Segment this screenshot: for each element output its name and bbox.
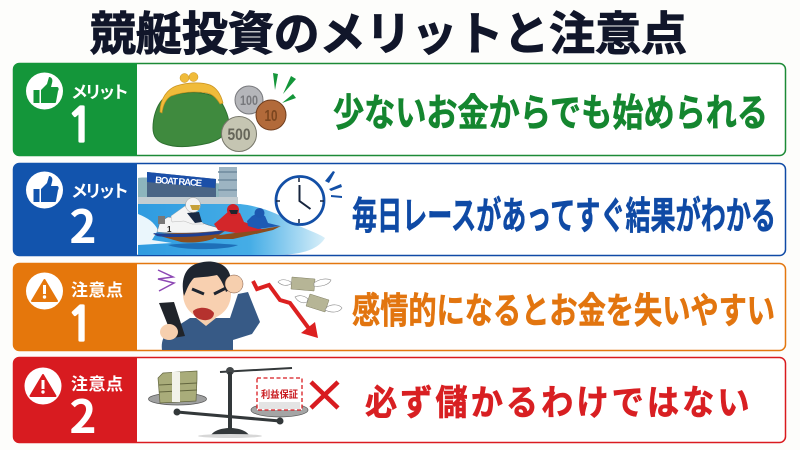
icon: coin purse and coins [153, 72, 296, 152]
icon: thumbs up [26, 72, 63, 110]
number 2: 2 [69, 191, 97, 257]
panel: merit 1 [13, 63, 786, 156]
icon: thumbs up [26, 172, 63, 208]
icon: coin purse and coins: 100 [240, 92, 258, 108]
number 2: 2 [69, 381, 97, 447]
panel: caution 1 [13, 262, 786, 351]
panel: merit 2 [13, 163, 786, 257]
icon: coin purse and coins: 10 [264, 108, 278, 125]
icon: warning [26, 272, 63, 310]
number 1: 1 [66, 302, 95, 349]
illustration: boat race [138, 167, 342, 255]
caution text 2: 必ず儲かるわけではない [365, 384, 750, 423]
number 1: 1 [66, 103, 95, 150]
label: merit: メリット [71, 83, 129, 102]
label: caution: 注意点 [71, 281, 123, 300]
illustration: boat race: 1 [167, 225, 172, 234]
panel: caution 2 [13, 357, 786, 447]
illustration: upset man with phone and falling chart [158, 262, 342, 350]
illustration: balance scale [148, 367, 338, 438]
label: merit: メリット [71, 182, 129, 201]
illustration: boat race: BOAT RACE [155, 175, 202, 189]
illustration: balance scale: 利益保証 [261, 388, 298, 401]
title: 競艇投資のメリットと注意点 [90, 8, 687, 60]
label: caution: 注意点 [71, 375, 123, 394]
icon: coin purse and coins: 500 [228, 125, 250, 144]
icon: warning [24, 368, 62, 404]
